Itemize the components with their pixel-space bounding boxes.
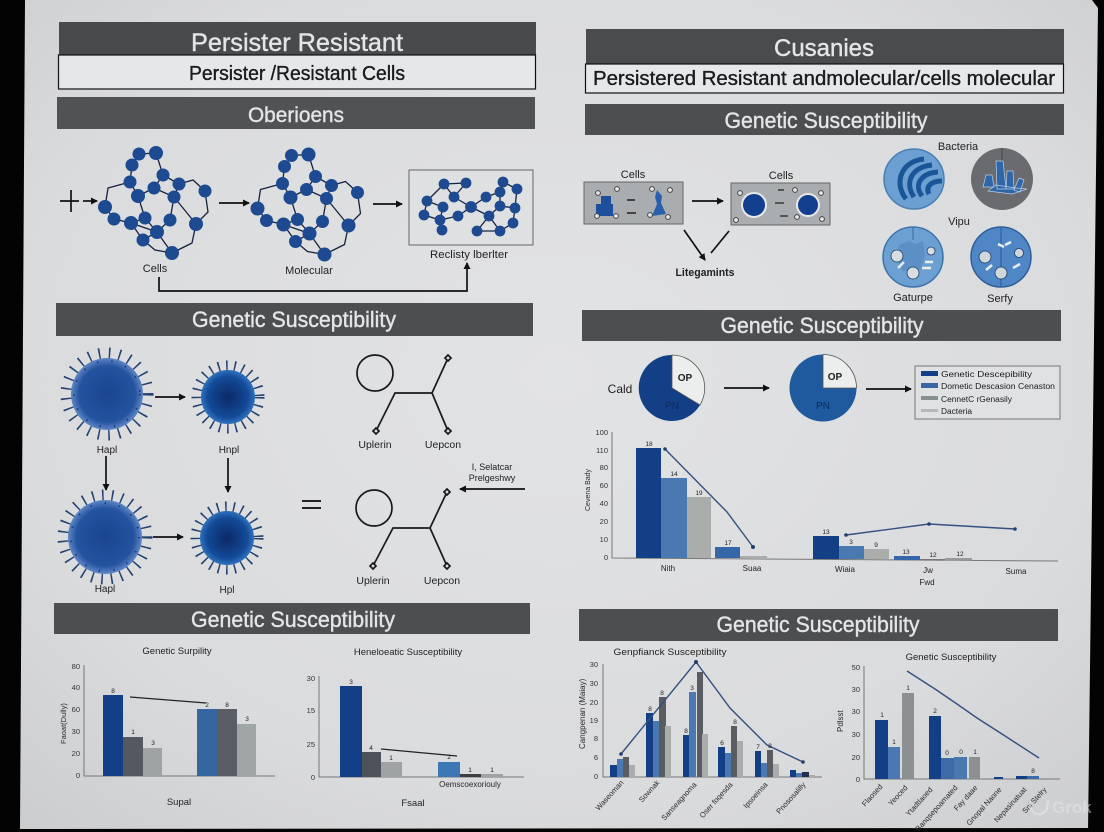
label: Hapl: Hapl bbox=[97, 445, 117, 456]
network: molecular bbox=[251, 148, 364, 261]
bar chart: Genetic Surpility: 3 bbox=[245, 716, 249, 723]
bar chart: right middle: 3 bbox=[849, 539, 853, 546]
bar chart: Genetic Susceptibility: 0 bbox=[959, 749, 963, 756]
bar chart: Heneloeatic Susceptibility: 0 bbox=[311, 773, 315, 782]
cell box 1 bbox=[584, 182, 683, 224]
bar chart: right middle: 80 bbox=[600, 463, 608, 472]
bar chart: Genetic Surpility: Genetic Surpility bbox=[142, 646, 212, 657]
heading: Persister Resistant: Persister Resistant bbox=[191, 29, 403, 57]
bar chart: Genpfianck Susceptibility: 8 bbox=[660, 690, 664, 697]
bar chart: Genetic Surpility: 8 bbox=[111, 688, 115, 695]
label: Litegamints: Litegamints bbox=[676, 267, 734, 279]
bar chart: Genpfianck Susceptibility: Ipsoeinsa bbox=[741, 780, 770, 810]
bar chart: Heneloeatic Susceptibility: 1 bbox=[490, 767, 494, 774]
arrow bbox=[866, 388, 911, 390]
bar chart: Genpfianck Susceptibility: 3 bbox=[690, 685, 694, 692]
bar chart: Heneloeatic Susceptibility: 3 bbox=[349, 679, 353, 686]
network box: Reclisty lberlter bbox=[409, 170, 533, 245]
bar chart: right middle: 20 bbox=[600, 517, 608, 526]
bar chart: Genetic Susceptibility: 0 bbox=[856, 775, 860, 784]
icon: bacteria circle grey bbox=[971, 148, 1033, 210]
bar chart: Heneloeatic Susceptibility: 15 bbox=[307, 706, 315, 715]
bar chart: Genpfianck Susceptibility: 0 bbox=[594, 772, 598, 781]
bar chart: Genpfianck Susceptibility: 8 bbox=[768, 743, 772, 750]
subheading: Persister/Resistant Cells: Persister /Resistant Cells bbox=[189, 63, 405, 85]
bar chart: Heneloeatic Susceptibility: 4 bbox=[369, 745, 373, 752]
bar chart: Genetic Susceptibility: Ytadtlaoed bbox=[904, 785, 934, 818]
bar chart: right middle: Suaa bbox=[743, 564, 762, 573]
label: Cells: Cells bbox=[621, 169, 646, 181]
heading: Genetic Susceptibility (right middle): Genetic Susceptibility bbox=[720, 313, 924, 338]
heading: Persister Resistant bbox=[59, 22, 536, 57]
subheading: Persister/Resistant Cells bbox=[58, 55, 536, 89]
bar chart: Genpfianck Susceptibility: 8 bbox=[684, 728, 688, 735]
bar chart: Heneloeatic Susceptibility: 2 bbox=[447, 754, 451, 761]
icon: virus 4 bbox=[196, 507, 258, 569]
icon: cell circle blue bbox=[883, 227, 943, 287]
bar chart: Genpfianck Susceptibility: Cangpenan (Maiay) bbox=[578, 678, 587, 749]
bar chart: Genetic Surpility: 3 bbox=[151, 740, 155, 747]
heading: Genetic Susceptibility (left middle): Genetic Susceptibility bbox=[192, 307, 396, 332]
label: Hnpl: Hnpl bbox=[219, 445, 239, 456]
panel: molecular networks bbox=[60, 146, 533, 291]
bar chart: Heneloeatic Susceptibility: 1 bbox=[389, 755, 393, 762]
arrow bbox=[373, 203, 402, 205]
legend: CennetC rGenasily bbox=[941, 395, 1012, 404]
bar chart: right middle: 12 bbox=[956, 551, 964, 558]
bar chart: Genpfianck Susceptibility: Genpfianck Susceptibility bbox=[614, 647, 727, 658]
bar chart: Genetic Surpility: 20 bbox=[72, 749, 80, 758]
callout: Selatcar Prelgeshwy: I, Selatcar bbox=[472, 462, 512, 472]
heading: Genetic Susceptibility (right top) bbox=[585, 104, 1064, 135]
heading: Cusanies: Cusanies bbox=[774, 35, 874, 62]
arrow bbox=[153, 536, 183, 538]
bar chart: right middle: 40 bbox=[600, 499, 608, 508]
bar chart: Genpfianck Susceptibility: 19 bbox=[590, 716, 598, 725]
label: Molecular: Molecular bbox=[285, 265, 333, 277]
legend: Genetic Descepibility bbox=[941, 369, 1033, 379]
bar chart: right middle: 13 bbox=[822, 529, 830, 536]
heading: Genetic Susceptibility (left middle) bbox=[56, 303, 533, 336]
bar chart: right middle: 14 bbox=[670, 471, 678, 478]
watermark: Grok bbox=[1029, 798, 1092, 817]
label: Gaturpe: Gaturpe bbox=[893, 292, 933, 304]
bar chart: Genetic Susceptibility: Genetic Susceptibility bbox=[906, 652, 997, 663]
bar chart: Heneloeatic Susceptibility bbox=[307, 647, 524, 809]
bar chart: right middle: 110 bbox=[596, 446, 608, 455]
bar chart: Genetic Surpility bbox=[59, 646, 275, 808]
bar chart: right middle: 9 bbox=[874, 542, 878, 549]
bar chart: Genetic Surpility: 8 bbox=[225, 702, 229, 709]
bar chart: Genetic Surpility: 0 bbox=[76, 771, 80, 780]
bar chart: Genetic Susceptibility: Gnopal Naone bbox=[964, 785, 1003, 827]
label: Cells: Cells bbox=[769, 170, 794, 182]
bar chart: Genetic Surpility: 40 bbox=[72, 683, 80, 692]
pie chart 1: PN bbox=[665, 401, 679, 412]
label: Cald: Cald bbox=[608, 382, 632, 396]
label: Bacteria: Bacteria bbox=[938, 141, 979, 153]
bar chart: Genetic Surpility: 1 bbox=[131, 729, 135, 736]
callout: Selatcar Prelgeshwy bbox=[469, 462, 516, 483]
bar chart: Genetic Susceptibility: 1 bbox=[973, 749, 977, 756]
bar chart: Genpfianck Susceptibility: Sanseagnoma bbox=[659, 780, 699, 822]
bar chart: right middle: Jw bbox=[923, 566, 933, 575]
bar chart: Genetic Susceptibility: 30 bbox=[852, 730, 860, 739]
bar chart: Genetic Susceptibility: Pdlsst bbox=[836, 709, 845, 732]
bar chart: Genetic Susceptibility: 30 bbox=[852, 685, 860, 694]
arrow bbox=[460, 488, 525, 490]
bar chart: Genpfianck Susceptibility: 7 bbox=[756, 744, 760, 751]
bar chart: Genetic Susceptibility: Nepasinatuat bbox=[992, 785, 1029, 824]
bar chart: Genetic Surpility: 30 bbox=[72, 727, 80, 736]
bar chart: right middle: 19 bbox=[695, 490, 703, 497]
bar chart: Genetic Surpility: Faoat(Dully) bbox=[59, 703, 68, 744]
heading: Genetic Susceptibility (right bottom) bbox=[579, 609, 1058, 641]
bar chart: Genetic Susceptibility: Flaosed bbox=[860, 782, 884, 808]
pie chart 2: PN bbox=[816, 401, 830, 412]
bar chart: right middle: 13 bbox=[902, 549, 910, 556]
bar chart: Genetic Susceptibility: 0 bbox=[945, 750, 949, 757]
heading: Genetic Susceptibility (left bottom) bbox=[54, 603, 530, 634]
panel: top left title bbox=[58, 22, 536, 89]
bar chart: right middle: 100 bbox=[595, 428, 608, 437]
bar chart: Genpfianck Susceptibility: Waseoman bbox=[594, 778, 625, 812]
bar chart: Genpfianck Susceptibility: Pnososalilly bbox=[774, 780, 808, 816]
bar chart: right middle: Cevena Bady bbox=[585, 468, 592, 511]
icon: plus with arrow bbox=[60, 190, 97, 212]
bar chart: Genpfianck Susceptibility: Oser foqesda bbox=[698, 780, 735, 820]
bar chart: Genetic Susceptibility: 1 bbox=[892, 739, 896, 746]
panel: pies and legend bbox=[608, 354, 1060, 422]
heading: Oberioens: Oberioens bbox=[248, 104, 344, 127]
bar chart: Genetic Susceptibility: 1 bbox=[880, 712, 884, 719]
callout: Selatcar Prelgeshwy: Prelgeshwy bbox=[469, 473, 516, 483]
heading: Genetic Susceptibility (right top): Genetic Susceptibility bbox=[724, 108, 928, 133]
bar chart: Genetic Susceptibility: Sni Stelry bbox=[1020, 785, 1049, 815]
panel: cell diagrams bbox=[584, 141, 1033, 305]
bar chart: Genetic Surpility: Supal bbox=[167, 797, 191, 808]
legend: Dometic Descasion Cenaston bbox=[941, 382, 1055, 391]
watermark: Grok: Grok bbox=[1052, 798, 1092, 817]
label: Hapl: Hapl bbox=[95, 584, 115, 595]
icon: virus 2 bbox=[197, 366, 259, 428]
pie chart 1 bbox=[639, 355, 705, 421]
arrow line: Litegamints bbox=[711, 231, 729, 253]
arrow bbox=[219, 202, 249, 204]
bar chart: right middle: 18 bbox=[645, 441, 653, 448]
label: Serfy: Serfy bbox=[987, 293, 1013, 305]
arrow bbox=[692, 200, 723, 202]
cell box 2 bbox=[731, 183, 830, 225]
subheading: Persistered Resistant: Persistered Resistant andmolecular/cells molecular bbox=[593, 68, 1055, 90]
heading: Genetic Susceptibility (right bottom): Genetic Susceptibility bbox=[716, 612, 920, 637]
bar chart: Genpfianck Susceptibility: 8 bbox=[648, 706, 652, 713]
bar chart: Genetic Susceptibility: 30 bbox=[852, 707, 860, 716]
icon: cell circle dark blue bbox=[971, 227, 1031, 287]
molecule diagram 2 bbox=[356, 489, 450, 569]
heading: Oberioens bbox=[57, 97, 535, 129]
label: Cells: Cells bbox=[143, 263, 168, 275]
arrow: down to Litegamints bbox=[684, 230, 705, 260]
bar chart: right middle: Nith bbox=[661, 564, 675, 573]
label: Uepcon: Uepcon bbox=[425, 439, 461, 451]
label: Uepcon: Uepcon bbox=[424, 575, 460, 587]
bar chart: right middle: 0 bbox=[604, 553, 608, 562]
label: Uplerin: Uplerin bbox=[356, 575, 390, 587]
bar chart: Genetic Susceptibility: 50 bbox=[852, 663, 860, 672]
pie chart 1: OP bbox=[678, 373, 693, 384]
heading: Cusanies bbox=[586, 29, 1064, 64]
bar chart: Genetic Susceptibility: 20 bbox=[852, 753, 860, 762]
bar chart: Genetic Susceptibility bbox=[836, 652, 1060, 832]
label: Hpl: Hpl bbox=[219, 585, 235, 596]
bar chart: Heneloeatic Susceptibility: 1 bbox=[468, 767, 472, 774]
bar chart: Genetic Surpility: 80 bbox=[72, 662, 80, 671]
bar chart: Genetic Surpility: 2 bbox=[205, 702, 209, 709]
bar chart: right middle: Suma bbox=[1006, 567, 1027, 576]
bar chart: right middle: Wiaia bbox=[835, 565, 856, 574]
network: cells bbox=[98, 146, 211, 260]
arrow bbox=[227, 458, 229, 492]
bar chart: Heneloeatic Susceptibility: Oemscoexoriouly bbox=[439, 780, 501, 789]
bar chart: Heneloeatic Susceptibility: 25 bbox=[307, 740, 315, 749]
arrow bbox=[155, 396, 185, 398]
pie chart 2 bbox=[790, 354, 856, 422]
bar chart: right middle: 10 bbox=[600, 535, 608, 544]
bar chart: Genpfianck Susceptibility: 30 bbox=[590, 660, 598, 669]
arrow: feedback bbox=[159, 263, 467, 291]
bar chart: Genetic Susceptibility: Yeoced bbox=[886, 783, 909, 808]
bar chart: Heneloeatic Susceptibility: Heneloeatic Susceptibility bbox=[354, 647, 462, 658]
bar chart: Genpfianck Susceptibility bbox=[578, 647, 822, 822]
bar chart: right middle: 17 bbox=[724, 540, 732, 547]
bar chart: Genpfianck Susceptibility: 20 bbox=[590, 698, 598, 707]
bar chart: Genetic Susceptibility: 2 bbox=[933, 708, 937, 715]
bar chart: Genetic Susceptibility: 8 bbox=[1031, 768, 1035, 775]
icon: virus 3 bbox=[64, 496, 146, 578]
bar chart: Genetic Surpility: 60 bbox=[72, 705, 80, 714]
heading: Genetic Susceptibility (right middle) bbox=[582, 310, 1061, 341]
legend: Dacteria bbox=[941, 407, 973, 416]
icon: virus 1 bbox=[67, 354, 147, 434]
label: Vipu: Vipu bbox=[948, 216, 970, 228]
bar chart: Genpfianck Susceptibility: Sownak bbox=[637, 778, 662, 804]
bar chart: Genpfianck Susceptibility: 6 bbox=[594, 753, 598, 762]
bar chart: Genetic Susceptibility: Banqsepoamated bbox=[913, 783, 959, 832]
panel: virus cells bbox=[64, 354, 525, 596]
pie chart 2: OP bbox=[828, 372, 843, 383]
legend bbox=[915, 366, 1060, 419]
bar chart: Genetic Susceptibility: 1 bbox=[906, 685, 910, 692]
bar chart: Heneloeatic Susceptibility: Fsaal bbox=[401, 798, 425, 809]
bar chart: Genpfianck Susceptibility: 6 bbox=[720, 740, 724, 747]
bar chart: Genpfianck Susceptibility: 30 bbox=[590, 679, 598, 688]
bar chart: Heneloeatic Susceptibility: 30 bbox=[307, 674, 315, 683]
bar chart: right middle bbox=[585, 428, 1058, 587]
arrow bbox=[724, 387, 769, 389]
bar chart: right middle: 60 bbox=[600, 481, 608, 490]
equals sign bbox=[302, 501, 321, 508]
icon: bacteria circle blue bbox=[884, 149, 944, 209]
bar chart: Genetic Susceptibility: Fay daae bbox=[952, 783, 979, 813]
label: Uplerin: Uplerin bbox=[358, 439, 392, 451]
bar chart: Genpfianck Susceptibility: 8 bbox=[733, 719, 737, 726]
arrow bbox=[105, 456, 107, 490]
bar chart: right middle: 12 bbox=[929, 552, 937, 559]
heading: Genetic Susceptibility (left bottom): Genetic Susceptibility bbox=[191, 607, 395, 632]
bar chart: Genpfianck Susceptibility: 8 bbox=[594, 734, 598, 743]
label: Reclisty lberlter: Reclisty lberlter bbox=[430, 249, 508, 261]
molecule diagram 1 bbox=[357, 355, 451, 434]
bar chart: right middle: Fwd bbox=[919, 578, 935, 587]
